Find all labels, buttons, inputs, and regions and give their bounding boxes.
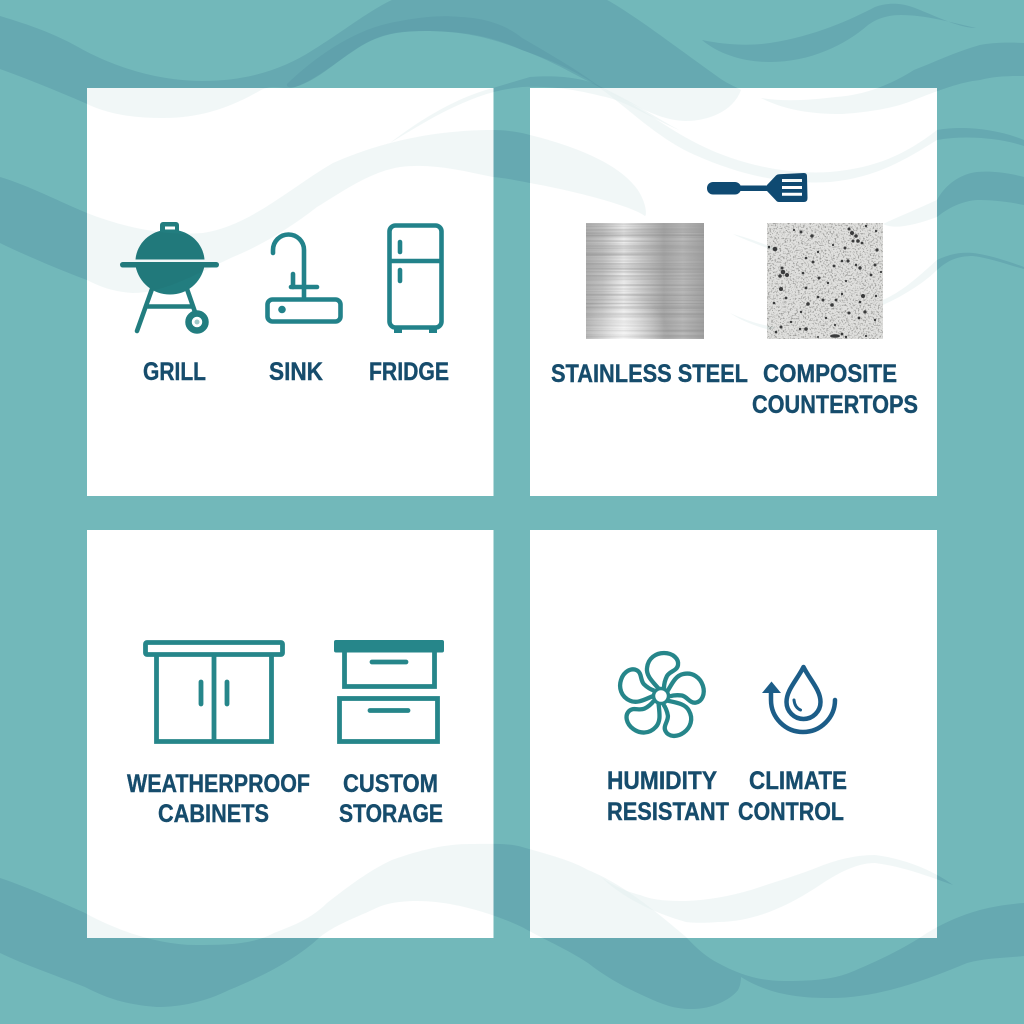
label: composite countertops: COMPOSITE — [763, 360, 897, 388]
swatch: stainless steel — [586, 223, 704, 339]
icon: sink — [268, 234, 340, 322]
label: climate control — [738, 767, 847, 826]
icon: grill — [120, 222, 219, 331]
label: humidity resistant — [607, 767, 729, 826]
label: custom storage: CUSTOM — [343, 770, 438, 798]
label: sink: SINK — [269, 358, 323, 386]
icon: fridge — [390, 226, 442, 333]
label: stainless steel: STAINLESS STEEL — [551, 360, 748, 388]
label: climate control: CLIMATE — [749, 767, 847, 795]
label: fridge: FRIDGE — [369, 358, 449, 386]
icon: weatherproof cabinet — [146, 642, 282, 742]
label: grill: GRILL — [143, 358, 206, 386]
label: climate control: CONTROL — [738, 798, 844, 826]
label: composite countertops: COUNTERTOPS — [752, 391, 918, 419]
label: humidity resistant: RESISTANT — [607, 798, 729, 826]
panel: climate — [530, 530, 937, 938]
icon: custom storage drawers — [334, 640, 444, 742]
icon: humidity fan — [616, 653, 707, 741]
label: custom storage — [339, 770, 443, 828]
panel: storage — [87, 530, 494, 938]
icon: climate control drop — [762, 667, 835, 732]
label: weatherproof cabinets: WEATHERPROOF — [127, 770, 310, 798]
faint waves showing through panels — [87, 88, 937, 938]
label: composite countertops — [752, 360, 918, 419]
icon: spatula — [707, 173, 808, 202]
label: weatherproof cabinets — [127, 770, 310, 828]
label: weatherproof cabinets: CABINETS — [158, 800, 269, 828]
swatch: composite countertop — [767, 223, 883, 339]
panel: materials — [530, 88, 937, 496]
label: humidity resistant: HUMIDITY — [607, 767, 717, 795]
label: custom storage: STORAGE — [339, 800, 443, 828]
panel: appliances — [87, 88, 494, 496]
